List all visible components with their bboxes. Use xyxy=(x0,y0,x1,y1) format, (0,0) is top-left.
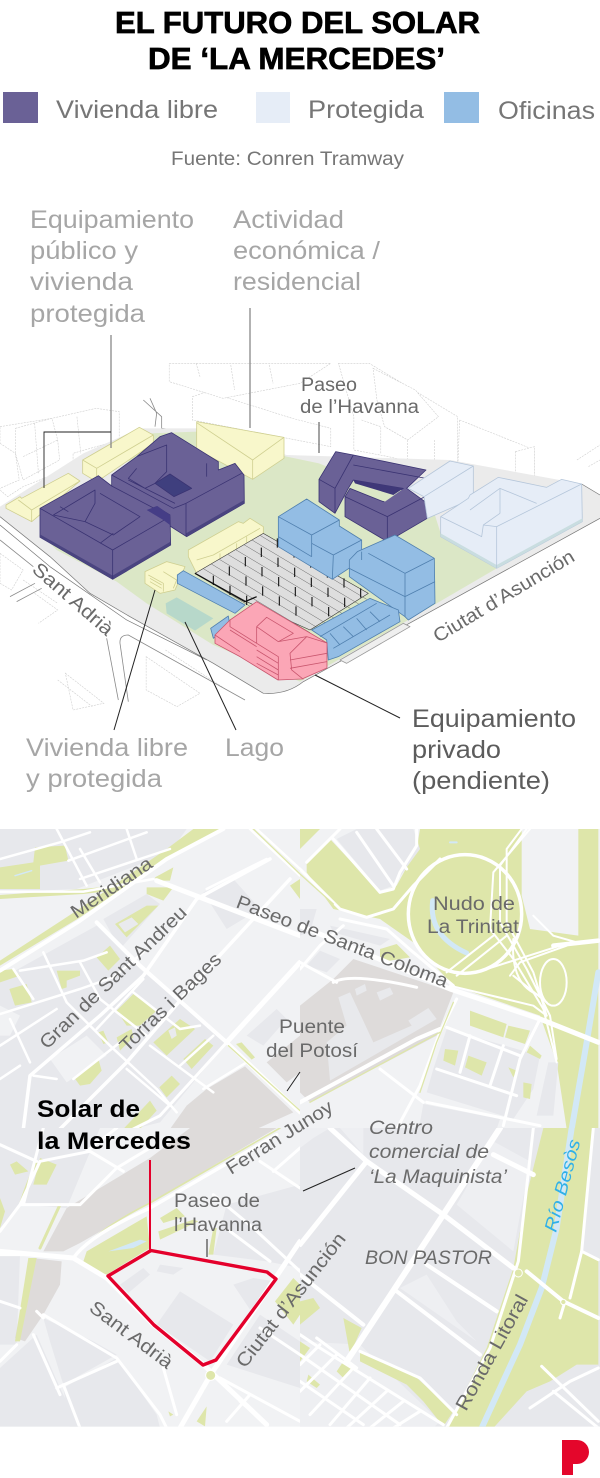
map quadrant: north-east xyxy=(300,829,600,1129)
plate outline xyxy=(0,484,600,694)
label: bon pastor: BON PASTOR xyxy=(365,1248,492,1269)
map quadrant: south-west xyxy=(0,1128,300,1428)
leader lines xyxy=(44,308,400,730)
map leader lines xyxy=(207,1072,355,1257)
vivienda libre block south xyxy=(40,476,171,579)
logo xyxy=(562,1440,589,1475)
label: ronda litoral: Ronda Litoral xyxy=(452,1291,533,1414)
vivienda libre block north xyxy=(112,433,244,537)
legend item: protegida: Protegida xyxy=(308,96,424,124)
ground plate xyxy=(0,428,600,694)
legend item: oficinas xyxy=(444,92,595,125)
label: equipamiento privado: (pendiente) xyxy=(412,767,550,795)
vivienda libre block east xyxy=(319,452,427,542)
label: solar de la mercedes: la Mercedes xyxy=(37,1128,191,1155)
legend item: vivienda libre: Vivienda libre xyxy=(56,96,218,124)
label: ferran junoy: Ferran Junoy xyxy=(223,1096,338,1179)
label: nudo de la trinitat xyxy=(427,894,520,938)
label: puente del potosí xyxy=(266,1017,359,1062)
label: equipamiento público y vivienda protegida xyxy=(30,206,194,328)
label: equipamiento privado: privado xyxy=(412,736,501,764)
label: vivienda libre y protegida: y protegida xyxy=(26,765,162,793)
label: equipamiento público y vivienda protegida: Equipamiento xyxy=(30,206,194,234)
road outlines around the site xyxy=(0,398,245,702)
purple buildings xyxy=(40,433,427,579)
label: meridiana: Meridiana xyxy=(67,853,157,923)
label: nudo de la trinitat: La Trinitat xyxy=(427,917,520,938)
yellow buildings xyxy=(6,422,284,593)
map labels xyxy=(36,853,584,1414)
label: equipamiento público y vivienda protegida: vivienda xyxy=(30,268,133,296)
map quadrant: north-west xyxy=(0,829,300,1129)
label: vivienda libre y protegida xyxy=(26,734,188,793)
label: solar de la mercedes: Solar de xyxy=(37,1096,140,1123)
label: centro comercial: Centro xyxy=(369,1118,433,1139)
label: sant adrià map: Sant Adrià xyxy=(85,1297,177,1374)
protegida buildings xyxy=(408,461,582,568)
map quadrant: south-east xyxy=(300,1128,600,1428)
label: equipamiento privado: Equipamiento xyxy=(412,705,576,733)
title: EL FUTURO DEL SOLAR xyxy=(115,5,480,40)
parking grid xyxy=(195,533,368,637)
label: actividad económica / residencial xyxy=(233,206,380,296)
leader: equipamiento público xyxy=(110,335,112,448)
label: centro comercial xyxy=(369,1118,508,1188)
label: equipamiento privado xyxy=(412,705,576,795)
label: sant adrià street: Sant Adrià xyxy=(28,559,117,641)
label: actividad económica / residencial: residencial xyxy=(233,268,361,296)
leader: vivienda libre y protegida xyxy=(114,590,155,730)
title xyxy=(115,5,480,76)
label: paseo de l'Havanna: Paseo xyxy=(301,375,357,396)
label: paseo de l'Havanna map xyxy=(174,1191,262,1236)
title: DE ‘LA MERCEDES’ xyxy=(148,41,445,76)
label: ciutat d'asunción street: Ciutat d’Asunción xyxy=(430,546,579,647)
label: gran de sant andreu: Gran de Sant Andreu xyxy=(36,902,191,1054)
label: actividad económica / residencial: Actividad xyxy=(233,206,344,234)
location map xyxy=(0,829,600,1428)
label: paseo de santa coloma: Paseo de Santa Coloma xyxy=(233,892,451,992)
label: paseo de l'Havanna map: l’Havanna xyxy=(174,1215,262,1236)
legend item: vivienda libre xyxy=(3,92,218,124)
pink building: equipamiento privado xyxy=(215,602,327,680)
leader: equipamiento privado xyxy=(315,675,400,718)
label: nudo de la trinitat: Nudo de xyxy=(433,894,515,915)
label: paseo de l'Havanna xyxy=(300,375,419,418)
isometric site diagram xyxy=(0,398,600,702)
legend item: protegida xyxy=(256,92,424,124)
label: equipamiento público y vivienda protegida: protegida xyxy=(30,300,145,328)
label: río besòs: Río Besòs xyxy=(541,1137,584,1234)
legend item: oficinas: Oficinas xyxy=(498,97,595,125)
leader: paseo de l'Havanna xyxy=(318,422,320,453)
source note: Fuente: Conren Tramway xyxy=(171,149,405,170)
label: puente del potosí: Puente xyxy=(279,1017,345,1038)
label: paseo de l'Havanna map: Paseo de xyxy=(174,1191,260,1212)
leader: actividad económica xyxy=(249,308,251,428)
legend xyxy=(3,92,595,125)
label: centro comercial: ‘La Maquinista’ xyxy=(369,1167,508,1188)
label: solar de la mercedes xyxy=(37,1096,191,1155)
label: puente del potosí: del Potosí xyxy=(266,1041,359,1062)
oficinas buildings xyxy=(177,499,435,663)
surrounding buildings outlines xyxy=(0,363,600,710)
leader: lago xyxy=(185,622,236,730)
lago xyxy=(166,597,213,631)
label: equipamiento público y vivienda protegida: público y xyxy=(30,237,139,265)
label: ciutat d'asunción map: Ciutat d’Asunción xyxy=(232,1229,351,1372)
label: torras i bages: Torras i Bages xyxy=(116,949,226,1057)
site outline: solar de la mercedes xyxy=(108,1160,276,1365)
label: paseo de l'Havanna: de l’Havanna xyxy=(300,397,419,418)
label: actividad económica / residencial: económica / xyxy=(233,237,380,265)
label: lago: Lago xyxy=(225,734,284,762)
label: centro comercial: comercial de xyxy=(369,1142,489,1163)
green area xyxy=(40,432,497,682)
leader: branch to yellow block xyxy=(44,432,111,488)
label: vivienda libre y protegida: Vivienda libre xyxy=(26,734,188,762)
